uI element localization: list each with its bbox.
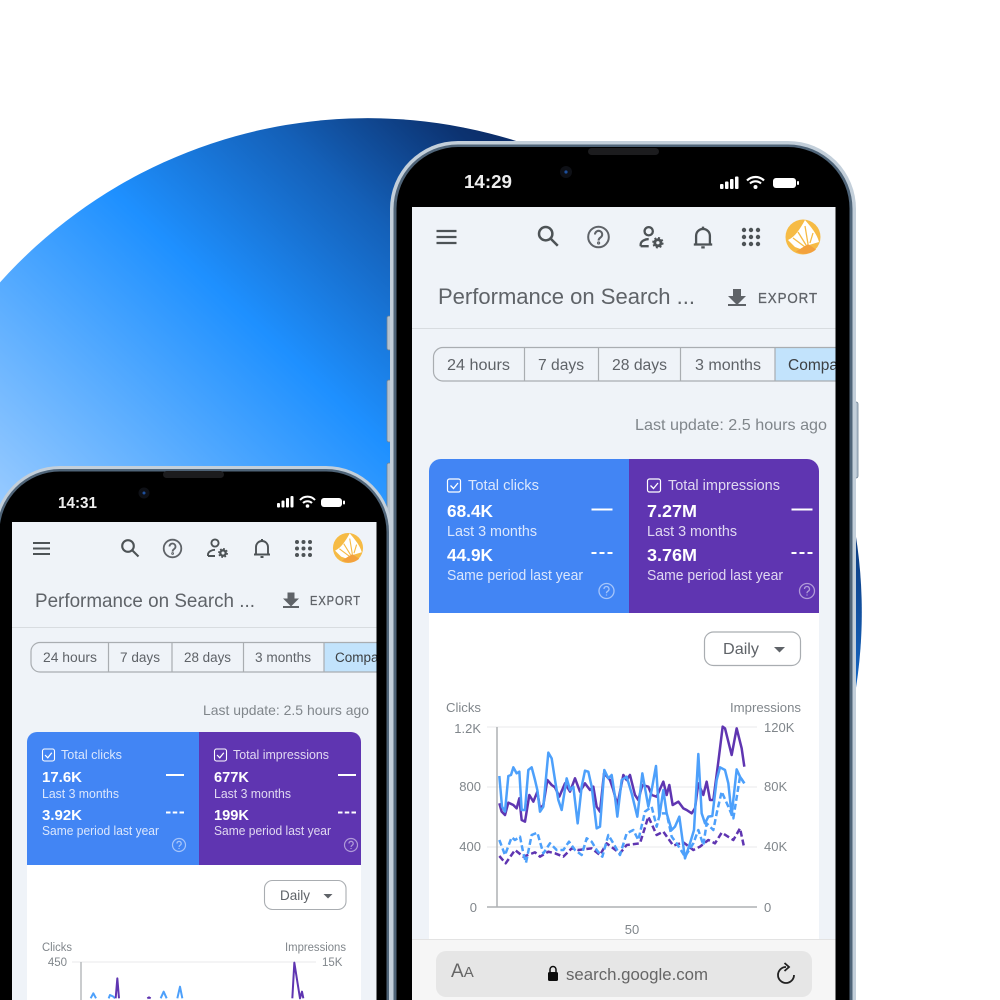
- date range segmented control: [434, 348, 860, 381]
- heading: Performance on Search ...: [438, 284, 695, 309]
- metric card: total impressions: 199K: [214, 807, 249, 824]
- line chart: clicks and impressions: [42, 942, 346, 1000]
- metric card: total impressions: 677K: [214, 769, 249, 786]
- metric card: total clicks: [27, 732, 199, 865]
- export button: EXPORT: [758, 291, 818, 307]
- metric card: total clicks: Total clicks: [468, 478, 539, 494]
- icon: avatar: [786, 220, 820, 254]
- date range segmented control: 7 days: [120, 650, 160, 665]
- metric card: total clicks: Same period last year: [42, 824, 159, 838]
- axis labels: 1.2K: [454, 721, 481, 736]
- metric card: total clicks: 44.9K: [447, 545, 493, 565]
- metric card: total impressions: Same period last year: [647, 568, 783, 584]
- icon: apps grid: [742, 228, 760, 246]
- daily dropdown: [264, 880, 346, 910]
- metric card: total clicks: 68.4K: [447, 501, 493, 521]
- icon: menu: [33, 543, 50, 554]
- status bar: [464, 172, 799, 192]
- date range segmented control: 24 hours: [43, 650, 97, 665]
- last update note: Last update: 2.5 hours ago: [203, 702, 369, 718]
- export button: [728, 289, 818, 307]
- browser address bar: search.google.com: [566, 965, 708, 984]
- screen content: [412, 207, 860, 1000]
- metric card: total impressions: Total impressions: [233, 748, 329, 762]
- icon: help: [588, 227, 609, 247]
- metric card: total impressions: 3.76M: [647, 545, 697, 565]
- daily dropdown: [704, 632, 800, 666]
- date range segmented control: Compare: [335, 650, 391, 665]
- metric card: total impressions: Total impressions: [668, 478, 780, 494]
- axis labels: Impressions: [285, 942, 346, 954]
- device frame: [387, 141, 858, 1000]
- date range segmented control: 3 months: [695, 357, 761, 374]
- white chart card: [429, 600, 819, 940]
- axis labels: [446, 700, 802, 937]
- axis labels: 800: [459, 779, 481, 794]
- browser address bar: [412, 939, 836, 1000]
- icon: search: [122, 540, 138, 556]
- icon: notifications: [694, 227, 712, 247]
- axis labels: 0: [470, 900, 477, 915]
- white chart card: [27, 850, 361, 1000]
- daily dropdown: Daily: [280, 887, 310, 903]
- icon: notifications: [254, 539, 270, 557]
- status bar: 14:29: [464, 172, 512, 192]
- metric card: total impressions: Last 3 months: [214, 787, 291, 801]
- last update note: Last update: 2.5 hours ago: [635, 417, 827, 434]
- date range segmented control: Compare: [788, 357, 852, 374]
- metric card: total clicks: Last 3 months: [42, 787, 119, 801]
- toolbar icons: [33, 533, 363, 563]
- icon: user settings: [208, 539, 227, 557]
- date range segmented control: 3 months: [255, 650, 311, 665]
- background gradient circle: [0, 118, 862, 1000]
- phone: small left device: [0, 466, 400, 1000]
- metric card: total impressions: Last 3 months: [647, 524, 737, 540]
- axis labels: [42, 942, 346, 969]
- date range segmented control: 24 hours: [447, 357, 510, 374]
- icon: user settings: [641, 227, 663, 248]
- icon: search: [539, 227, 558, 246]
- axis labels: 450: [48, 957, 67, 969]
- metric card: total impressions: 7.27M: [647, 501, 697, 521]
- line chart: clicks and impressions: [446, 700, 802, 937]
- metric card: total clicks: Total clicks: [61, 748, 122, 762]
- axis labels: 15K: [322, 957, 343, 969]
- status bar: [58, 495, 345, 512]
- heading: Performance on Search ...: [35, 590, 255, 612]
- axis labels: Clicks: [446, 700, 481, 715]
- axis labels: 40K: [764, 839, 787, 854]
- toolbar icons: [436, 220, 820, 254]
- icon: help: [164, 540, 181, 557]
- icon: menu: [436, 231, 456, 243]
- phone: large right device: [387, 141, 860, 1000]
- axis labels: Impressions: [730, 700, 802, 715]
- axis labels: Clicks: [42, 942, 72, 954]
- icon: apps grid: [295, 540, 312, 557]
- axis labels: 120K: [764, 720, 795, 735]
- data series: [91, 963, 303, 998]
- status bar: 14:31: [58, 495, 97, 512]
- metric card: total impressions: [629, 459, 819, 613]
- metric card: total impressions: [199, 732, 361, 865]
- device frame: [0, 466, 392, 1000]
- axis labels: 80K: [764, 779, 787, 794]
- export button: EXPORT: [310, 594, 361, 608]
- metric card: total clicks: 3.92K: [42, 807, 82, 824]
- axis labels: 50: [625, 922, 639, 937]
- date range segmented control: [31, 642, 400, 672]
- axis labels: 400: [459, 839, 481, 854]
- screen content: [12, 522, 400, 1000]
- metric card: total clicks: Last 3 months: [447, 524, 537, 540]
- data series: [499, 727, 744, 863]
- metric card: total clicks: Same period last year: [447, 568, 583, 584]
- daily dropdown: Daily: [723, 641, 759, 658]
- date range segmented control: 7 days: [538, 357, 584, 374]
- date range segmented control: 28 days: [184, 650, 231, 665]
- metric card: total clicks: 17.6K: [42, 769, 82, 786]
- browser address bar: AA: [451, 961, 474, 982]
- metric card: total clicks: [429, 459, 629, 613]
- export button: [283, 592, 361, 608]
- date range segmented control: 28 days: [612, 357, 667, 374]
- metric card: total impressions: Same period last year: [214, 824, 331, 838]
- icon: avatar: [333, 533, 363, 563]
- axis labels: 0: [764, 900, 771, 915]
